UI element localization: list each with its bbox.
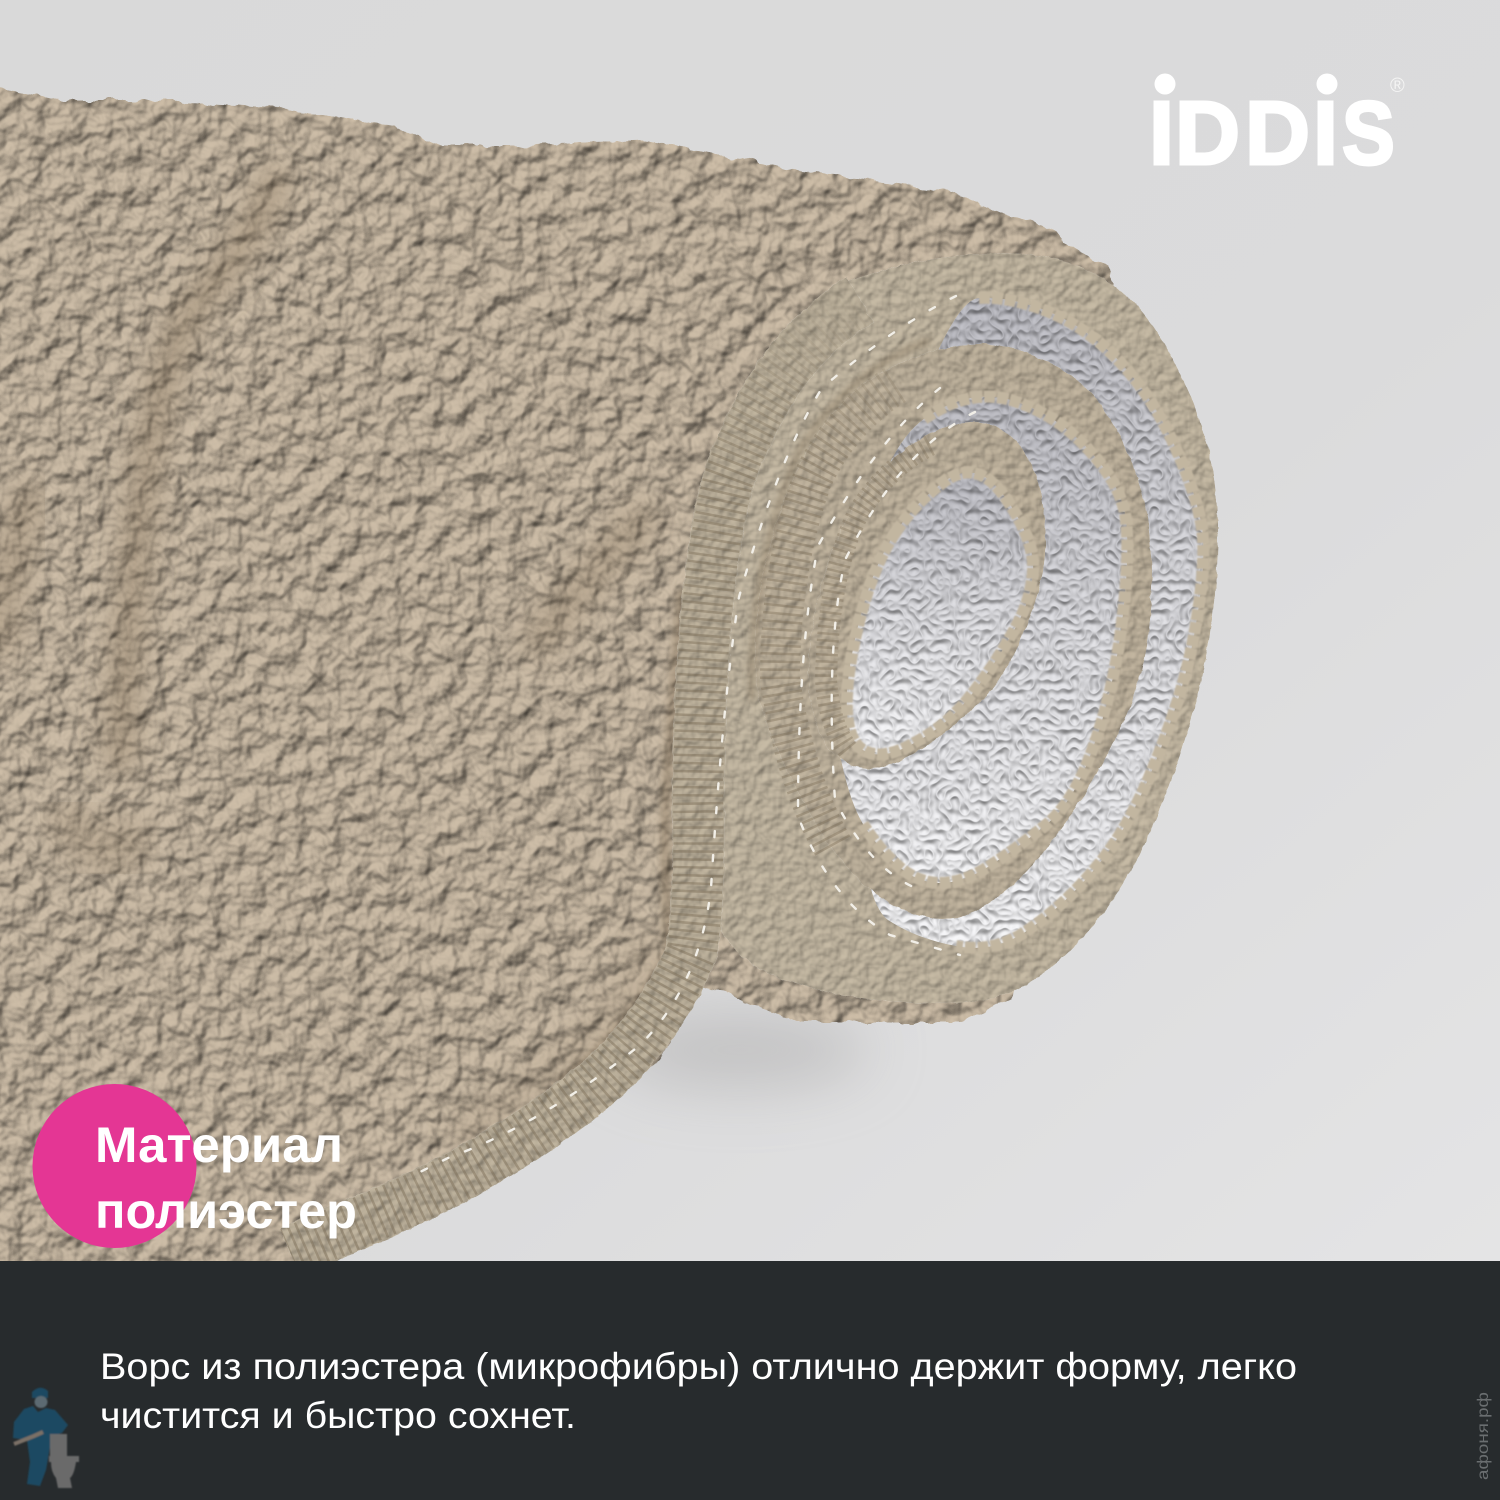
IDDIS logo [1149, 74, 1405, 184]
pink accent circle [32, 1084, 196, 1248]
white stitching [420, 296, 975, 1172]
logo wordmark: D [1175, 84, 1240, 184]
backing: outer coil [855, 298, 1203, 948]
heading: Материал [95, 1117, 343, 1173]
rolled rug [0, 82, 1218, 1275]
rope edges around the backing [847, 298, 1203, 948]
backing: centre hole [847, 472, 1033, 754]
toilet [49, 1434, 79, 1488]
roll end: middle coil [755, 344, 1152, 919]
backing: middle coil [837, 397, 1127, 883]
heading: полиэстер [95, 1183, 357, 1239]
front edge binding [290, 296, 975, 1252]
rug shadow on the floor [610, 1012, 870, 1088]
plumber figure [13, 1388, 68, 1486]
description text: Ворс из полиэстера (микрофибры) отлично держит форму, легко [100, 1346, 1297, 1387]
description text: чистится и быстро сохнет. [100, 1395, 576, 1436]
plumber face [34, 1396, 48, 1408]
rug pile surface [0, 82, 1130, 1275]
wrench [14, 1432, 43, 1444]
vertical site watermark: афоня.рф [1475, 1392, 1492, 1480]
description text [100, 1346, 1297, 1436]
logo wordmark: D [1245, 84, 1310, 184]
roll end: inner coil [809, 422, 1046, 769]
registered mark: ® [1390, 75, 1405, 97]
logo wordmark: S [1342, 82, 1395, 183]
logo wordmark [1149, 82, 1395, 184]
roll end: outer coil [684, 253, 1218, 1003]
plumber watermark icon [13, 1388, 79, 1488]
dark description band [0, 1261, 1500, 1500]
logo wordmark: I [1313, 84, 1338, 184]
pile shading grooves [0, 180, 650, 1130]
logo dots [1154, 74, 1338, 94]
logo wordmark: I [1149, 84, 1174, 184]
heading [95, 1117, 357, 1239]
